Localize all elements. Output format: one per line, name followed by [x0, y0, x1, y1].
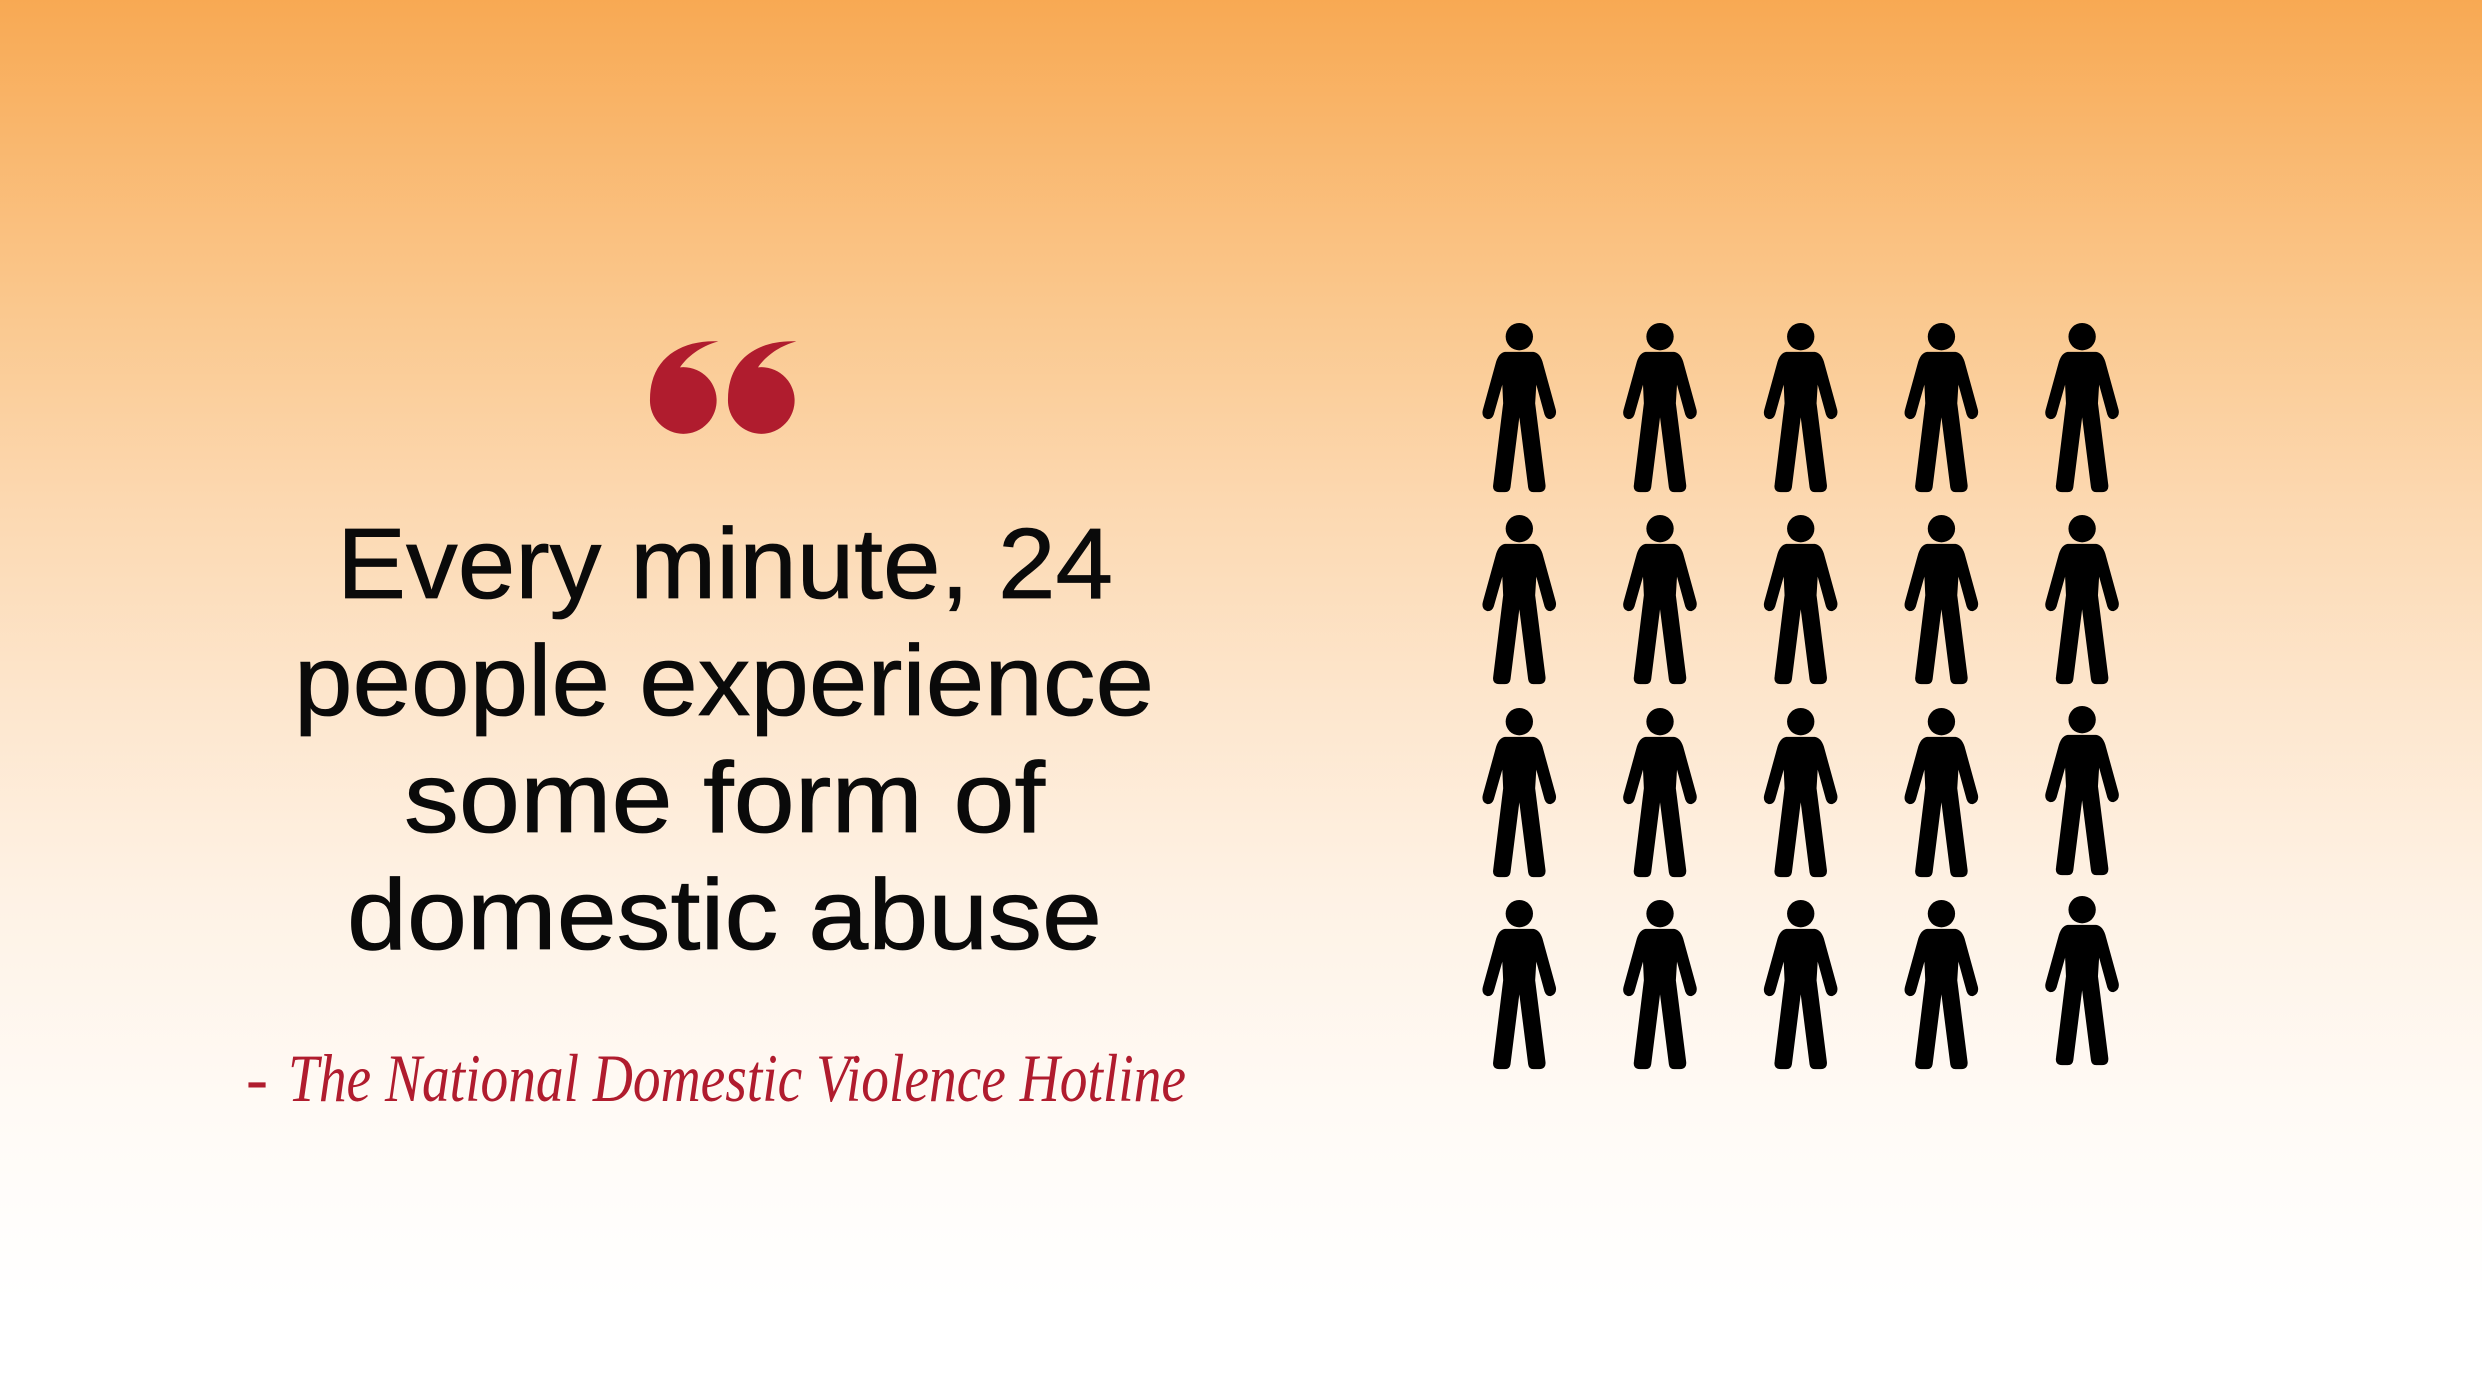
attribution: The National Domestic Violence Hotline	[288, 1040, 1186, 1116]
quote text: Every minute, 24	[337, 508, 1113, 620]
attribution: -	[246, 1040, 268, 1116]
icon: quotation mark	[650, 341, 796, 434]
row 2	[1483, 515, 2118, 684]
quote text: some form of	[404, 742, 1045, 854]
quote text: domestic abuse	[347, 859, 1102, 971]
quote text	[294, 508, 1154, 971]
row 3	[1483, 706, 2118, 877]
row 1	[1483, 323, 2118, 492]
quote text: people experience	[294, 625, 1154, 737]
row 4	[1483, 896, 2118, 1069]
pictogram: grid of 20 people	[1483, 323, 2118, 1069]
